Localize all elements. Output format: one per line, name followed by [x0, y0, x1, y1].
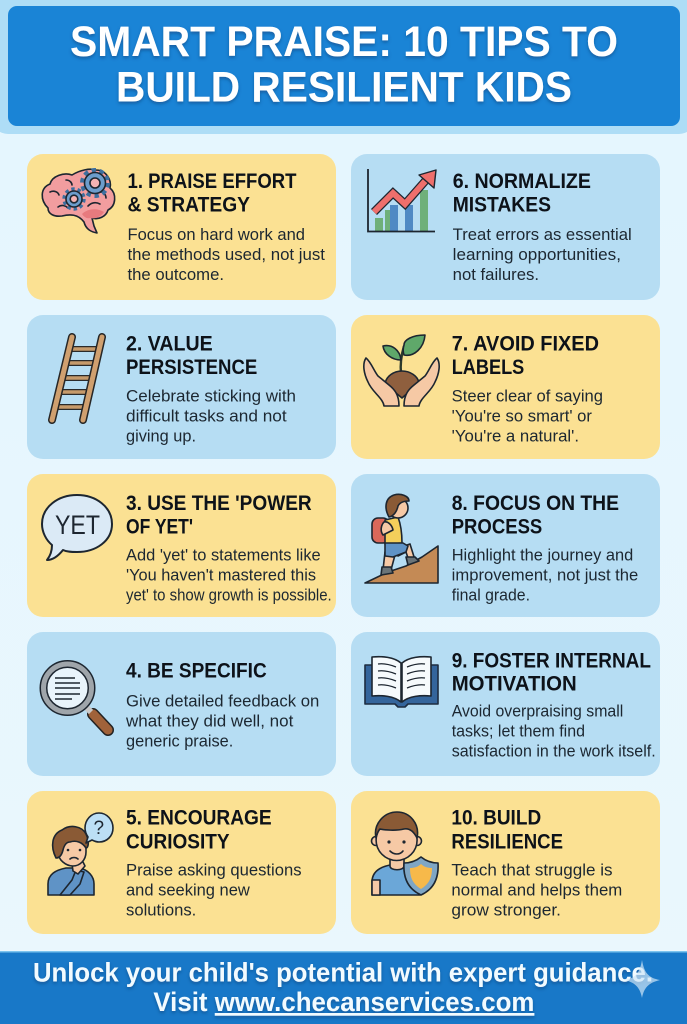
text block: yet' to show growth is possible. [126, 587, 332, 605]
text block [126, 388, 296, 446]
title [70, 18, 618, 112]
text block: Add 'yet' to statements like [126, 547, 321, 565]
text block: Teach that struggle is [451, 862, 613, 880]
text block: giving up. [126, 428, 196, 446]
panel: tip 3 [27, 474, 336, 617]
panel: tip 5 [27, 791, 336, 934]
icon: child with shield [372, 812, 438, 895]
text block [126, 547, 332, 605]
text block: Celebrate sticking with [126, 388, 296, 406]
text block: grow stronger. [451, 902, 561, 920]
heading [126, 332, 257, 379]
text block: Avoid overpraising small [452, 703, 623, 721]
text block [452, 547, 638, 605]
panel: tip 4 [27, 632, 336, 776]
icon: yet speech bubble [42, 495, 112, 560]
heading: CURIOSITY [126, 829, 230, 853]
text block [453, 226, 632, 284]
heading: 10. BUILD [451, 805, 541, 829]
call to action text: Visit www.checanservices.com [153, 987, 534, 1017]
panel: tip 6 [351, 154, 660, 300]
text block: the outcome. [128, 266, 224, 284]
panel: tip 9 [351, 632, 660, 776]
heading: & STRATEGY [128, 192, 250, 216]
panel: tip 1 [27, 154, 336, 300]
text block: and seeking new [126, 882, 250, 900]
heading: 9. FOSTER INTERNAL [452, 648, 651, 672]
title: BUILD RESILIENT KIDS [116, 64, 572, 112]
text block: not failures. [453, 266, 539, 284]
heading: 3. USE THE 'POWER [126, 491, 312, 515]
icon: curious person: ? [94, 818, 104, 839]
heading: 6. NORMALIZE [453, 169, 591, 193]
heading [126, 491, 312, 538]
text block: Give detailed feedback on [126, 693, 319, 711]
heading: 5. ENCOURAGE [126, 805, 272, 829]
icon: curious person [48, 813, 113, 895]
icon: child climbing hill [365, 494, 438, 583]
heading: MOTIVATION [452, 672, 577, 696]
icon: hands holding plant [364, 335, 439, 406]
heading [452, 648, 651, 696]
heading: PROCESS [452, 514, 542, 538]
heading: 4. BE SPECIFIC [126, 658, 267, 682]
call to action text [33, 958, 653, 1017]
text block: tasks; let them find [452, 723, 585, 741]
icon: open book [365, 657, 438, 707]
text block: difficult tasks and not [126, 408, 287, 426]
heading: RESILIENCE [451, 829, 563, 853]
heading [452, 491, 619, 538]
heading: 2. VALUE [126, 332, 213, 356]
header banner [0, 0, 687, 134]
text block: normal and helps them [451, 882, 622, 900]
text block: Praise asking questions [126, 862, 302, 880]
text block: improvement, not just the [452, 567, 638, 585]
text block: Focus on hard work and [128, 226, 305, 244]
title: SMART PRAISE: 10 TIPS TO [70, 18, 618, 66]
heading [126, 805, 272, 853]
text block: Treat errors as essential [453, 226, 632, 244]
heading: 7. AVOID FIXED [452, 332, 599, 356]
text block: Highlight the journey and [452, 547, 633, 565]
panel: tip 7 [351, 315, 660, 459]
text block: what they did well, not [125, 713, 294, 731]
heading [452, 332, 599, 379]
panel: tip 2 [27, 315, 336, 459]
icon: yet speech bubble: YET [55, 510, 100, 540]
heading: OF YET' [126, 514, 193, 538]
heading: LABELS [452, 355, 524, 379]
panel: tip 8 [351, 474, 660, 617]
icon: ladder [52, 337, 102, 420]
text block: Steer clear of saying [452, 388, 603, 406]
text block: 'You haven't mastered this [126, 567, 316, 585]
icon: magnifying glass [44, 664, 108, 730]
text block [452, 388, 603, 446]
text block: final grade. [452, 587, 530, 605]
text block: generic praise. [126, 733, 233, 751]
panel: tip 10 [351, 791, 660, 934]
text block [126, 862, 302, 920]
heading [453, 169, 591, 216]
call to action text: Unlock your child's potential with expert guidance. [33, 958, 653, 988]
footer banner [0, 951, 687, 1024]
heading: 8. FOCUS ON THE [452, 491, 619, 515]
text block: satisfaction in the work itself. [452, 743, 656, 761]
heading: PERSISTENCE [126, 355, 257, 379]
heading: MISTAKES [453, 192, 551, 216]
text block: solutions. [126, 902, 196, 920]
heading [128, 169, 296, 216]
heading: 1. PRAISE EFFORT [128, 169, 296, 193]
text block: the methods used, not just [128, 246, 325, 264]
heading [451, 805, 563, 853]
icon: rising chart [368, 169, 436, 232]
icon: brain with gears [42, 169, 115, 233]
text block: 'You're so smart' or [452, 408, 592, 426]
icon: sparkle [625, 960, 660, 998]
text block: learning opportunities, [453, 246, 621, 264]
text block [451, 862, 622, 920]
text block: 'You're a natural'. [452, 428, 579, 446]
text block [128, 226, 325, 284]
text block [452, 703, 656, 761]
text block [125, 693, 319, 751]
